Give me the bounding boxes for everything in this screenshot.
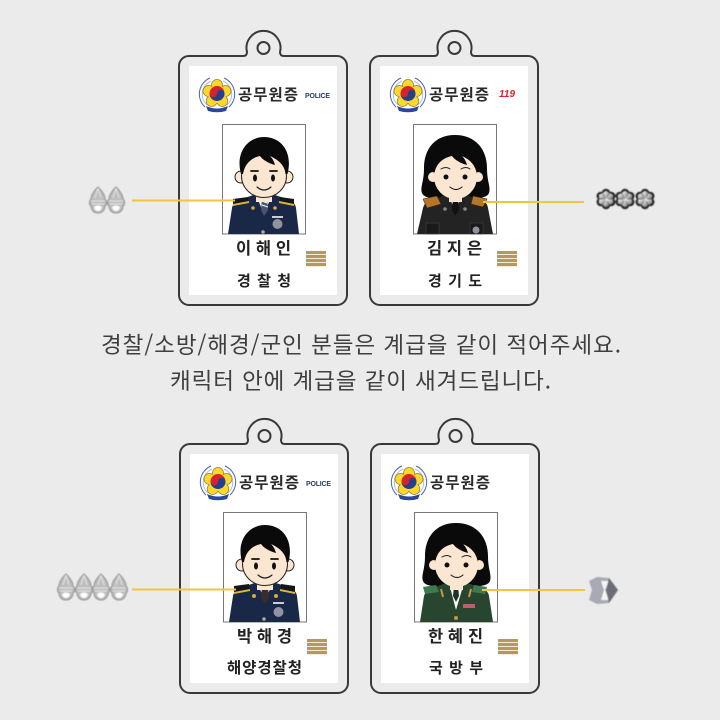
agency: 해양경찰청 [227,656,302,678]
name: 김 지 은 [427,235,482,259]
card title: 공무원증 [239,471,299,493]
ID card: military 한혜진 [371,419,539,693]
119 label: 119 [499,89,515,100]
portrait: female military officer [420,523,493,622]
card title: 공무원증 [238,83,298,105]
name: 한 혜 진 [428,623,483,647]
rank insignia: diamond [589,577,618,604]
agency: 경 기 도 [428,270,482,291]
portrait: female fire officer [417,135,493,234]
rank insignia: two hibiscus buds [90,187,124,213]
card title: 공무원증 [430,471,490,493]
connector line: fire rank [483,201,584,203]
instruction text [101,328,621,396]
connector line: coast guard rank [132,588,236,590]
emblem [391,466,427,500]
agency: 국 방 부 [429,657,483,678]
police label: POLICE [305,93,330,100]
emblem [390,78,426,112]
rank insignia: three flowers [596,189,654,209]
portrait: male coast guard officer [229,525,300,622]
agency: 경 찰 청 [237,270,291,291]
name: 이 해 인 [236,235,291,259]
emblem [200,466,236,500]
police label: POLICE [306,481,331,488]
emblem [199,78,235,112]
connector line: police rank [132,200,235,202]
ID card: coast guard 박해경 [180,419,348,693]
instruction text: 캐릭터 안에 계급을 같이 새겨드립니다. [170,364,551,396]
ID card: fire service 김지은 [370,31,538,305]
rank insignia: four hibiscus buds [58,574,128,600]
instruction text: 경찰/소방/해경/군인 분들은 계급을 같이 적어주세요. [101,328,621,360]
card title: 공무원증 [429,83,489,105]
portrait: male police officer [228,137,299,234]
ID card: police 이해인 [179,31,347,305]
connector line: military rank [482,589,585,591]
name: 박 해 경 [237,623,292,647]
